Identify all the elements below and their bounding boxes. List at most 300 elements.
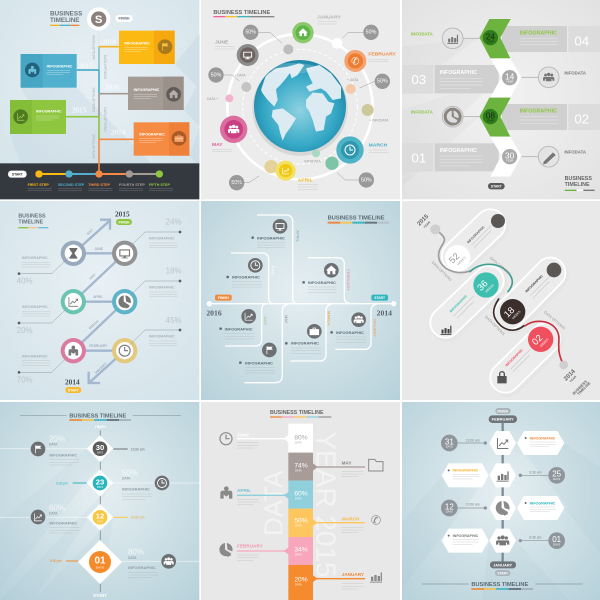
milestone: March clock [336, 136, 364, 164]
month labels: MARCH [369, 143, 388, 149]
arrow labels: MAY [89, 272, 97, 280]
data labels: DATA [128, 556, 137, 560]
curved connectors [435, 229, 564, 365]
infographic labels: INFOGRAPHIC [308, 280, 336, 285]
chevron: 14: YEAR [506, 80, 513, 84]
card text [448, 436, 556, 544]
day numbers: 31 [445, 437, 454, 446]
top badges: FEBRUARY [492, 417, 514, 422]
heading: TIMELINE [18, 220, 44, 226]
column segments with arrows [284, 424, 318, 600]
start badge: START [491, 185, 502, 189]
years and heading: BUSINESS [572, 379, 588, 396]
data labels: DATA [295, 523, 302, 527]
percentages: 40% [17, 277, 33, 286]
callouts: percent circles: 50% [211, 72, 222, 78]
heading: FINISH [95, 425, 106, 429]
infographic labels: INFOGRAPHIC [245, 360, 273, 365]
chevron: 08: 08 [486, 110, 495, 120]
diamond: 23 days: DAYS [97, 486, 104, 489]
infodata labels: INFODATA [411, 32, 434, 37]
percent values: 74% [294, 463, 308, 470]
disc: 18 weeks: WEEKS [511, 310, 522, 320]
disc: 36 weeks: WEEKS [484, 283, 495, 294]
bands [402, 26, 600, 171]
disc: 02 weeks: WEEKS [539, 337, 550, 348]
icons [31, 442, 176, 569]
card: 2018: INFOGRAPHIC [124, 41, 150, 45]
percent values: 60% [294, 490, 308, 497]
bottom badges [490, 561, 516, 576]
heading [565, 176, 595, 190]
disc: 52 weeks [445, 245, 470, 270]
infographic labels: INFOGRAPHIC [257, 235, 285, 240]
month labels: MAY [212, 142, 223, 148]
panel: globe timeline [201, 0, 400, 199]
card: 2017 [21, 54, 93, 88]
data labels: DATA [122, 477, 131, 481]
chevron: 08: YEAR [487, 119, 494, 123]
text blocks: INFOGRAPHIC [22, 354, 48, 358]
diamond: 23 days [87, 470, 113, 496]
day numbers [445, 437, 562, 544]
white branches [209, 215, 394, 383]
percentages: 20% [49, 434, 65, 443]
card: 2014 [111, 122, 189, 156]
arrow labels: JUNE [94, 247, 104, 251]
orbit rings [227, 34, 373, 179]
infodata labels [411, 32, 587, 154]
band headings: INFOGRAPHIC [440, 70, 477, 76]
step bar: FOURTH STEP [119, 183, 145, 187]
diamond: 12 days [87, 504, 113, 531]
disc: 36 weeks [473, 272, 499, 298]
percentages [17, 217, 182, 385]
time labels: 9:30 pm [56, 481, 68, 485]
percentages: 80% [128, 548, 144, 557]
diamond: 23 days: 23 [96, 477, 104, 486]
finish badge: FINISH [119, 17, 130, 21]
milestone: February phone [344, 50, 366, 72]
icons: ✆ [371, 514, 382, 528]
month labels: MARCH [327, 311, 332, 326]
day numbers: 12 [445, 502, 454, 511]
panel: diamond timeline [0, 402, 200, 600]
chevron: 14: 14 [505, 71, 515, 81]
watermark text [259, 431, 341, 578]
spine [499, 423, 506, 562]
top badges: FINISH [497, 409, 509, 413]
node: person [61, 338, 86, 363]
band headings: INFOGRAPHIC [520, 109, 557, 115]
data labels [49, 443, 137, 560]
time labels [50, 447, 145, 563]
node: chart [61, 289, 86, 314]
badges and years: START [374, 296, 385, 300]
card: 2014: 2014 [111, 127, 126, 136]
milestone: April chart [276, 161, 296, 181]
panel: branching white line timeline [201, 201, 400, 400]
month labels: MAY [284, 315, 289, 324]
percentages: 60% [49, 503, 65, 512]
percentages: 24% [166, 217, 182, 226]
time labels: 10:00 am [131, 516, 145, 520]
infographic labels: INFOGRAPHIC [291, 341, 319, 346]
month labels: MAY [342, 461, 352, 466]
infographic labels: INFOGRAPHIC [232, 275, 260, 280]
month labels: JANUARY [342, 572, 365, 577]
data labels: DATA [295, 496, 302, 500]
arrow labels [86, 227, 108, 375]
infodata labels: INFODATA [411, 110, 434, 115]
data labels: + DATA [234, 74, 246, 78]
percent values: 50% [294, 517, 308, 524]
heading: BUSINESS TIMELINE [471, 582, 528, 588]
month labels [263, 230, 377, 337]
band numbers: 01 [411, 150, 426, 165]
data options labels: DATA OPTIONS [484, 315, 506, 337]
badges and years: 2014 [377, 309, 392, 318]
data options labels: DATA OPTIONS [92, 87, 96, 112]
time labels: 9:30 am [529, 470, 542, 474]
month labels: FEBRUARY [368, 52, 397, 58]
callouts: percent circles: 50% [361, 177, 372, 183]
percent values: 34% [294, 547, 308, 554]
diamond: 01 days [78, 540, 122, 584]
data options labels [92, 34, 107, 158]
callouts: percent circles: 50% [245, 30, 256, 36]
callouts: percent circles: 50% [366, 30, 377, 36]
arrow labels: JANUARY [94, 361, 108, 375]
percent values: 80% [294, 434, 308, 441]
day labels [446, 445, 560, 546]
years and badges: 2014 [65, 378, 80, 387]
step bar: START [12, 173, 23, 177]
heading: BUSINESS TIMELINE [213, 10, 270, 16]
data labels: + INFODATA [369, 118, 389, 122]
heading [20, 413, 181, 429]
text blocks: INFOGRAPHIC [22, 256, 48, 260]
data labels: DATA + [207, 97, 218, 101]
infographic labels: INFOGRAPHIC [449, 294, 469, 313]
description lines [212, 22, 389, 189]
heading [18, 214, 48, 228]
card text: INFOGRAPHIC [453, 534, 479, 538]
infodata labels: INFODATA [564, 71, 587, 76]
leader lines [18, 231, 181, 374]
band headings: INFOGRAPHIC [440, 148, 477, 154]
card: 2016 [105, 77, 184, 110]
disc: 18 weeks: 18 [502, 305, 516, 319]
percentages: 70% [17, 376, 33, 385]
infographic labels [219, 235, 366, 373]
leader bars [237, 439, 365, 579]
milestone: February phone: ✆ [351, 57, 360, 68]
heading: BUSINESS TIMELINE [328, 216, 385, 222]
diamond: 30 days: 30 [96, 443, 104, 452]
data labels: DATA [295, 553, 302, 557]
data labels: DATA [295, 440, 302, 444]
globe [252, 60, 348, 156]
month labels [212, 15, 397, 183]
day circles [441, 435, 565, 549]
years and badges: FINISH [119, 220, 130, 224]
watermark text: YEAR 2015 [310, 431, 341, 578]
band numbers [411, 26, 590, 171]
disc: 18 weeks [500, 299, 525, 324]
data options labels: DATA OPTIONS [92, 34, 96, 59]
node: monitor [112, 241, 137, 266]
month labels: JANUARY [372, 318, 377, 337]
icons [219, 433, 383, 583]
day labels: DAYS [553, 477, 560, 481]
connector lines [66, 30, 134, 174]
milestone: June monitor [237, 44, 259, 66]
infodata labels: INFODATA [564, 149, 587, 154]
chevron: 30: 30 [505, 150, 515, 160]
text blocks: INFOGRAPHIC [149, 286, 175, 290]
text blocks: INFOGRAPHIC [22, 305, 48, 309]
callouts: percent circles [208, 25, 390, 190]
years and badges [65, 209, 132, 393]
disc: 36 weeks: 36 [475, 278, 490, 293]
node: pie [112, 289, 137, 314]
pills [445, 224, 552, 380]
disc: 52 weeks: 52 [447, 251, 461, 265]
disc: 02 weeks: 02 [530, 333, 544, 347]
badges and years: 2016 [206, 309, 222, 318]
years and badges: 2015 [115, 209, 130, 218]
small dots [225, 38, 374, 173]
band numbers: 03 [411, 72, 426, 87]
icons [441, 214, 561, 383]
percent values [294, 434, 308, 583]
heading: TIMELINE [50, 17, 80, 24]
day labels: DAYS [446, 445, 453, 449]
diamond: 30 days: DAYS [97, 452, 104, 455]
data labels [207, 74, 389, 164]
band headings: INFOGRAPHIC [520, 30, 557, 36]
chevron: 14 [490, 58, 521, 97]
years and heading: TIMELINE [577, 381, 592, 396]
bottom badges: JANUARY [493, 562, 513, 567]
data labels: INFODATA [304, 160, 321, 164]
data options labels [431, 256, 566, 337]
diamond: 30 days [87, 435, 113, 462]
card: 2016: 2016 [105, 83, 120, 92]
data options labels: DATA OPTIONS [103, 55, 107, 80]
chevron: 30: YEAR [506, 159, 513, 163]
heading: BUSINESS [565, 176, 592, 182]
heading: BUSINESS TIMELINE [69, 413, 126, 419]
diamond: 12 days: DAYS [97, 520, 104, 523]
side icons [442, 28, 559, 167]
hex icons [489, 431, 516, 553]
heading: BUSINESS [18, 214, 46, 220]
day labels: DAYS [446, 510, 453, 514]
disc: 52 weeks: WEEKS [456, 256, 467, 266]
infographic blocks: INFOGRAPHIC [128, 565, 156, 570]
month labels: JUNE [215, 39, 229, 45]
years and heading: YEAR [423, 220, 432, 229]
data options labels: DATA OPTIONS [92, 133, 96, 158]
arrows [73, 220, 125, 383]
data options labels: DATA OPTIONS [431, 261, 453, 282]
time labels: 13:00 am [131, 447, 145, 451]
heading: BUSINESS [50, 11, 82, 18]
milestone: January home [292, 22, 314, 43]
time labels: 10:00 am [466, 503, 480, 507]
arrow labels: APRIL [93, 295, 103, 299]
percentages: 18% [166, 267, 182, 276]
years and heading: YEAR [569, 374, 578, 383]
finish badge [87, 7, 133, 31]
heading: BUSINESS TIMELINE [270, 410, 324, 416]
diamond: 01 days: 01 [94, 555, 106, 566]
card: 2016: INFOGRAPHIC [134, 88, 160, 92]
percentages: 45% [166, 316, 182, 325]
panel: hexagon timeline [402, 402, 600, 600]
percentages [49, 434, 144, 557]
node: hourglass [61, 241, 86, 266]
card: 2015: INFOGRAPHIC [36, 110, 62, 114]
percentages: 20% [17, 326, 33, 335]
day numbers: 25 [552, 470, 562, 479]
step bar: THIRD STEP [88, 183, 111, 187]
band numbers: 02 [574, 111, 589, 126]
card text: INFOGRAPHIC [530, 436, 556, 440]
node: clock [112, 338, 137, 363]
diamond: 12 days: 12 [96, 512, 104, 521]
callouts: percent circles: 50% [377, 79, 388, 85]
band headings [440, 30, 557, 154]
description lines [237, 443, 363, 589]
percentages: 50% [122, 468, 138, 477]
infographic blocks: INFOGRAPHIC [49, 452, 77, 457]
card: 2018 [102, 31, 175, 64]
month labels: APRIL [295, 230, 300, 243]
card: 2015 [10, 100, 87, 134]
day labels: DAYS [553, 542, 560, 546]
description lines [454, 225, 550, 372]
panel: vertical colour column timeline [201, 402, 400, 600]
month labels: MARCH [342, 516, 360, 521]
panel: diagonal pills timeline [402, 201, 600, 400]
data options labels: DATA OPTIONS [543, 310, 566, 331]
month labels: FEBRUARY [346, 269, 351, 291]
card text: INFOGRAPHIC [453, 469, 479, 473]
years and heading [417, 213, 592, 396]
disc: 02 weeks [528, 327, 553, 352]
data labels: + DATA [347, 78, 359, 82]
end dots [430, 224, 568, 369]
month labels: FEBRUARY [237, 544, 264, 549]
month labels: APRIL [237, 488, 251, 493]
month labels: JULY [263, 316, 268, 325]
arrow labels: FEBRUARY [89, 344, 108, 348]
data options labels: DATA OPTIONS [103, 107, 107, 132]
card text: INFOGRAPHIC [530, 501, 556, 505]
finish badge: S [95, 14, 103, 26]
text blocks: INFOGRAPHIC [149, 335, 175, 339]
start badge [488, 183, 505, 189]
time labels: 13:00 am [466, 438, 480, 442]
panel: stepped business timeline [0, 0, 200, 199]
card: 2017: 2017 [79, 62, 93, 69]
infographic labels: INFOGRAPHIC [466, 225, 486, 244]
infographic blocks [49, 452, 158, 578]
bottom badges: START [497, 571, 508, 575]
step bar: SECOND STEP [58, 183, 85, 187]
arrow labels: MARCH [88, 319, 100, 330]
data options labels: DATA OPTIONS [489, 256, 512, 276]
card: 2017: INFOGRAPHIC [47, 64, 73, 68]
data labels: DATA [49, 443, 58, 447]
milestone: May people [220, 116, 247, 143]
month labels [237, 433, 365, 577]
badges and years: FINISH [218, 296, 229, 300]
month labels: JUNE [237, 433, 249, 438]
heading: TIMELINE [565, 182, 590, 188]
start label: START [93, 593, 107, 598]
infographic labels: INFOGRAPHIC [225, 326, 253, 331]
data labels [295, 440, 302, 586]
band numbers: 04 [574, 33, 590, 48]
chevron: 30 [490, 137, 521, 177]
infographic blocks: INFOGRAPHIC [49, 520, 77, 525]
infographic labels: INFOGRAPHIC [505, 348, 524, 367]
card: 2014: INFOGRAPHIC [139, 132, 165, 136]
step bar [0, 163, 199, 199]
time labels [466, 438, 542, 539]
connector lines [224, 32, 375, 183]
years and badges: START [68, 388, 79, 392]
infographic labels: INFOGRAPHIC [525, 274, 544, 293]
faint bands [0, 449, 200, 561]
spine [99, 430, 102, 592]
panel: zigzag circles timeline [0, 201, 199, 400]
callouts: percent circles: 50% [231, 180, 242, 186]
step bar: FIRST STEP [28, 183, 49, 187]
hex cards [442, 431, 564, 553]
chevron: 24: 24 [486, 31, 495, 41]
icons [241, 219, 366, 357]
month labels: JUNE [271, 265, 276, 276]
badges and years [206, 295, 392, 318]
text blocks: INFOGRAPHIC [149, 237, 175, 241]
step bar: FIFTH STEP [149, 183, 170, 187]
end dots [207, 301, 396, 306]
time labels: 8:30 am [529, 535, 542, 539]
chevron: 24 [479, 19, 511, 58]
card: 2018: 2018 [102, 39, 116, 46]
data labels: DATA [49, 512, 58, 516]
infographic blocks: INFOGRAPHIC [122, 487, 150, 492]
infographic labels: INFOGRAPHIC [336, 330, 364, 335]
chevron: 24: YEAR [487, 40, 494, 44]
data labels: DATA [295, 469, 302, 473]
card: 2015: 2015 [72, 106, 87, 115]
text blocks [22, 237, 177, 365]
percent values: 20% [294, 576, 308, 583]
arrow labels: JULY [86, 227, 95, 236]
month labels: APRIL [298, 177, 313, 183]
infographic labels [449, 225, 544, 367]
chevron: 08 [479, 98, 511, 137]
panel: chevron timeline [402, 0, 600, 199]
heading [50, 11, 82, 25]
top badges [489, 408, 517, 423]
